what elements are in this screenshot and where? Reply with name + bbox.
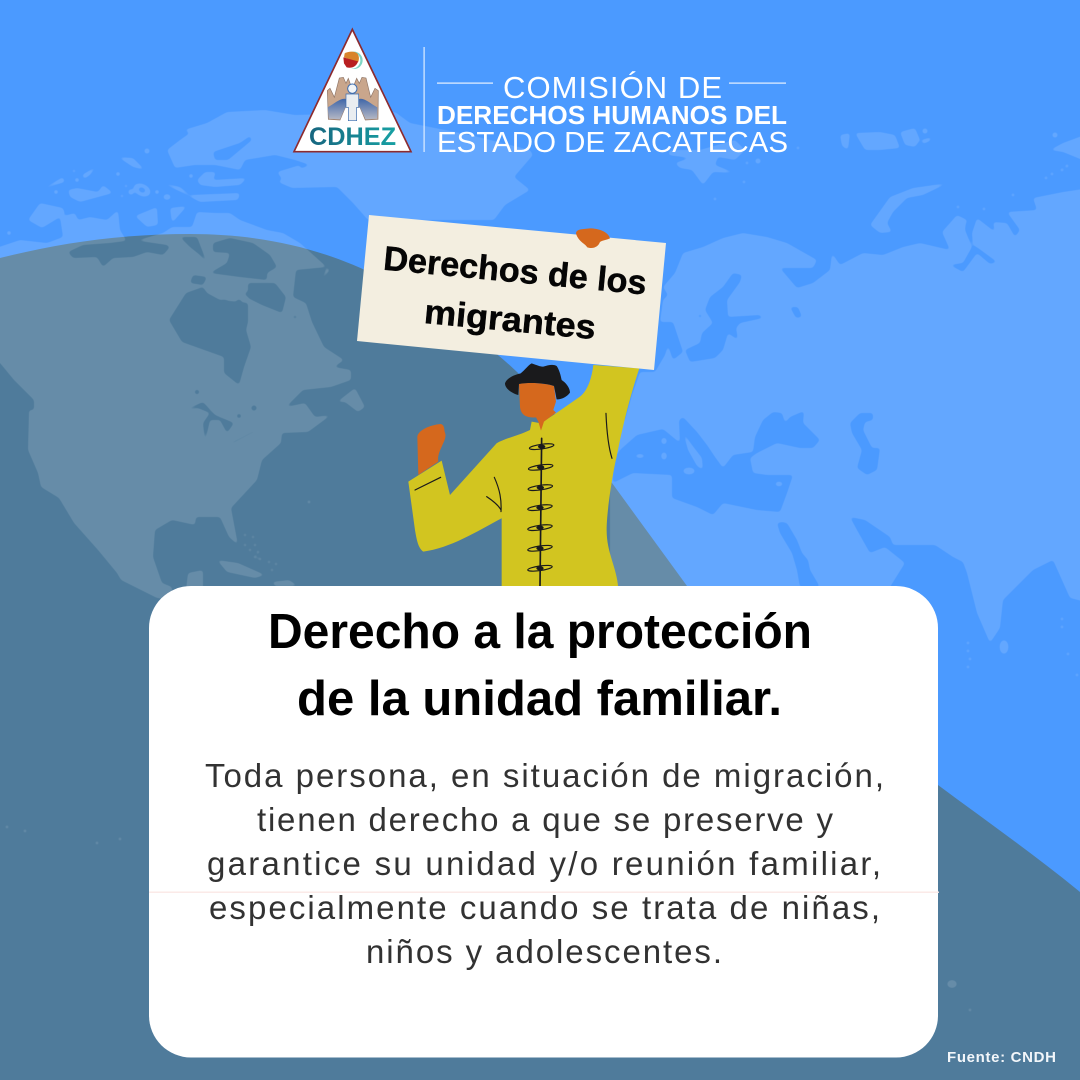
logo divider: [424, 47, 425, 152]
body text: especialmente cuando se trata de niñas,: [209, 889, 880, 926]
logo triangle: [294, 29, 411, 152]
body text: niños y adolescentes.: [366, 933, 722, 970]
body text: Toda persona, en situación de migración,: [205, 757, 884, 794]
organisation name: COMISIÓN DE: [503, 70, 722, 105]
sign text: [382, 240, 648, 347]
heading: de la unidad familiar.: [297, 672, 782, 726]
protest sign: [357, 215, 666, 370]
organisation name: [437, 70, 788, 159]
heading: Derecho a la protección: [268, 605, 812, 659]
sign board: [357, 215, 666, 370]
sign text: migrantes: [423, 293, 597, 347]
body text: tienen derecho a que se preserve y: [257, 801, 834, 838]
logo: CDHEZ: [294, 29, 411, 152]
panel: main card: [149, 586, 939, 1058]
globe: [0, 234, 1080, 1080]
source note: Fuente: CNDH: [947, 1049, 1056, 1066]
logo CDHEZ lettering: CDHEZ: [309, 123, 396, 151]
body text: [205, 757, 884, 970]
figure: migrant in yellow jacket: [408, 363, 639, 588]
hand holding sign: [576, 228, 610, 248]
sign text: Derechos de los: [382, 240, 648, 303]
organisation name: ESTADO DE ZACATECAS: [437, 127, 788, 159]
heading: [268, 605, 812, 726]
organisation name: DERECHOS HUMANOS DEL: [437, 100, 787, 130]
body text: garantice su unidad y/o reunión familiar,: [207, 845, 881, 882]
